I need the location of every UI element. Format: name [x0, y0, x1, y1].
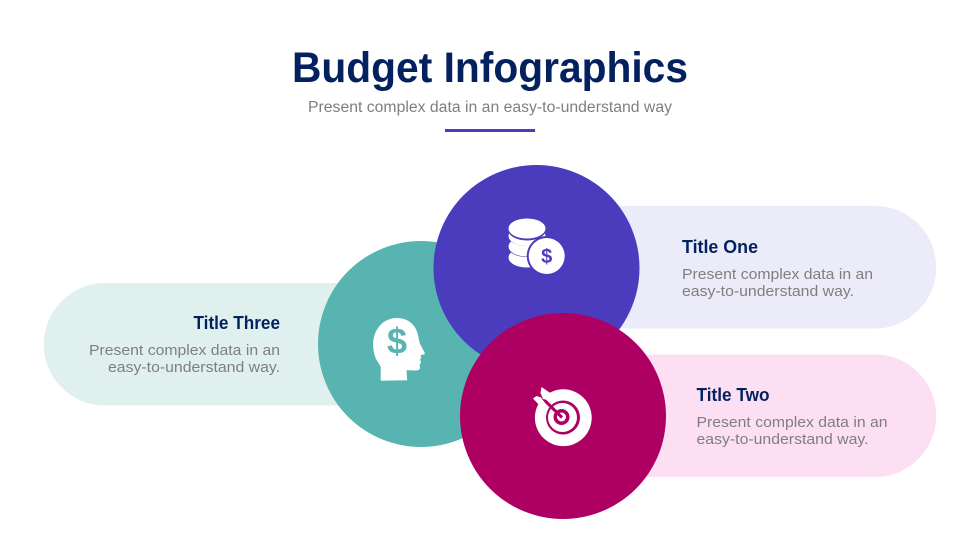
- circle: magenta: [460, 313, 666, 519]
- text block: title two: [696, 385, 888, 448]
- circle: teal: [318, 241, 524, 447]
- pill: title two: [563, 354, 936, 477]
- text block: title two: Title Two: [696, 385, 770, 405]
- icon: coins with dollar: $: [541, 246, 552, 268]
- text block: title two: easy-to-understand way.: [696, 431, 868, 448]
- title: Budget Infographics: [292, 44, 688, 92]
- text block: title one: Title One: [682, 237, 758, 257]
- text block: title three: Title Three: [194, 313, 280, 333]
- icon: head with dollar: [373, 318, 425, 381]
- text block: title two: Present complex data in an: [696, 414, 888, 431]
- text block: title three: easy-to-understand way.: [108, 359, 280, 376]
- subtitle: Present complex data in an easy-to-understand way: [308, 99, 672, 116]
- icon: coins with dollar: [508, 218, 567, 276]
- pill: title one: [536, 206, 936, 328]
- icon: target with arrow: [528, 384, 592, 446]
- title underline: [445, 129, 535, 132]
- text block: title one: Present complex data in an: [682, 266, 873, 283]
- text block: title one: [682, 237, 873, 300]
- icon: head with dollar: $: [387, 320, 407, 362]
- pill: title three: [44, 283, 421, 406]
- text block: title three: [89, 313, 280, 376]
- text block: title three: Present complex data in an: [89, 342, 280, 359]
- text block: title one: easy-to-understand way.: [682, 283, 854, 300]
- circle: blue: [434, 165, 640, 371]
